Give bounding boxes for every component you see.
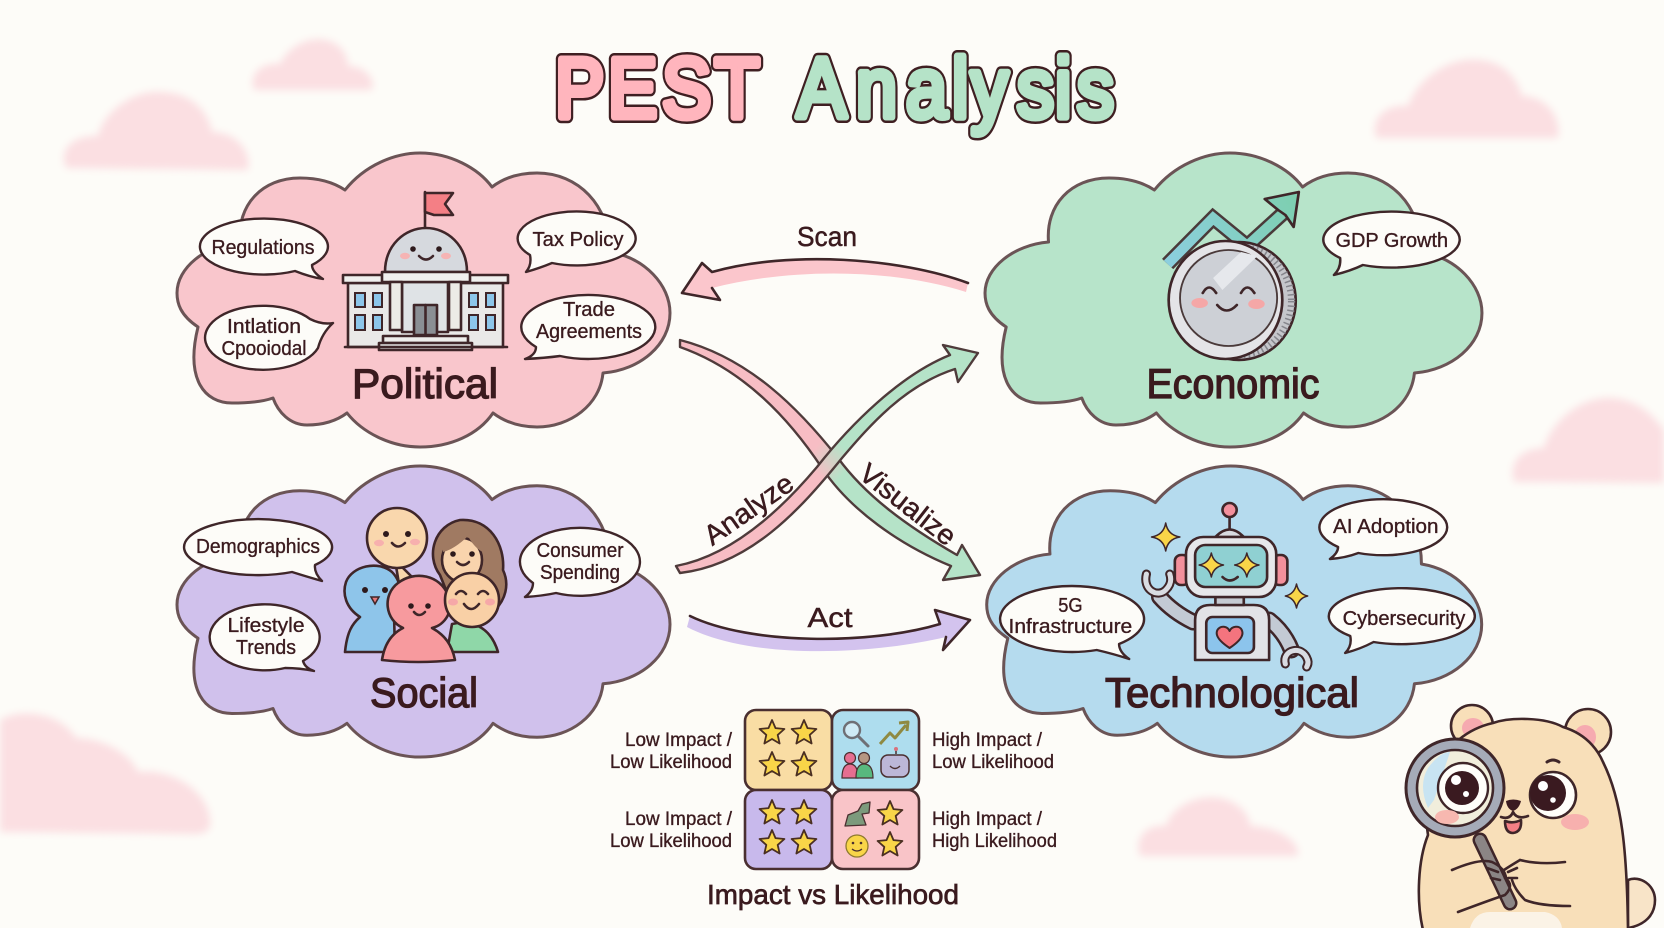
heading: Economic: Economic bbox=[1146, 360, 1320, 407]
arrow: Scan bbox=[682, 221, 968, 300]
cell: low impact low likelihood (yellow) bbox=[745, 710, 832, 790]
label: top-left quadrant: Low Likelihood bbox=[610, 752, 732, 773]
label: bottom-right quadrant: High Likelihood bbox=[932, 831, 1057, 852]
bubble: Tax Policy bbox=[518, 211, 636, 272]
icon: robot bbox=[1146, 503, 1308, 667]
chart: impact vs likelihood matrix bbox=[610, 710, 1057, 910]
bubble: AI Adoption bbox=[1319, 499, 1447, 559]
label: top-right quadrant: High Impact / bbox=[932, 730, 1043, 751]
bubble: AI Adoption: AI Adoption bbox=[1333, 516, 1438, 538]
arrow: Act bbox=[687, 602, 970, 651]
bubble: Consumer Spending: Spending bbox=[540, 562, 620, 584]
bubble: Cybersecurity: Cybersecurity bbox=[1343, 608, 1466, 630]
cell: high impact high likelihood (pink) bbox=[832, 790, 919, 869]
arrow: Scan: Scan bbox=[797, 221, 857, 252]
bubble: Trade Agreements: Agreements bbox=[536, 321, 642, 343]
bubble: GDP Growth bbox=[1323, 212, 1460, 275]
title: PEST Analysis: Analysis bbox=[797, 41, 1114, 135]
heading: Impact vs Likelihood: Impact vs Likelihood bbox=[707, 879, 959, 910]
label: bottom-right quadrant bbox=[932, 809, 1057, 852]
bubble: Consumer Spending bbox=[520, 528, 640, 597]
bubble: Lifestyle Trends: Lifestyle bbox=[228, 615, 304, 637]
bubble: Lifestyle Trends: Trends bbox=[236, 637, 296, 659]
cloud: Economic bbox=[985, 153, 1482, 447]
label: bottom-left quadrant bbox=[610, 809, 733, 852]
bubble: Regulations bbox=[200, 219, 328, 279]
icon: government building bbox=[343, 192, 508, 350]
panel: Political bbox=[177, 153, 670, 447]
label: bottom-left quadrant: Low Likelihood bbox=[610, 831, 732, 852]
cloud: Political bbox=[177, 153, 670, 447]
title: PEST Analysis bbox=[555, 41, 1114, 135]
mascot: bear with magnifying glass bbox=[1406, 705, 1655, 928]
bubble: 5G Infrastructure: 5G bbox=[1058, 595, 1083, 617]
heading: Political: Political bbox=[352, 360, 498, 407]
icon: group of people bbox=[345, 508, 506, 662]
panel: Economic bbox=[985, 153, 1482, 447]
panel: Social bbox=[177, 466, 670, 757]
label: top-right quadrant: Low Likelihood bbox=[932, 752, 1054, 773]
bubble: Inflation: Cpooiodal bbox=[222, 338, 306, 360]
arrow: Analyze bbox=[676, 345, 978, 573]
bubble: 5G Infrastructure: Infrastructure bbox=[1009, 616, 1132, 638]
label: top-left quadrant bbox=[610, 730, 733, 773]
bubble: Regulations: Regulations bbox=[212, 237, 314, 259]
label: bottom-right quadrant: High Impact / bbox=[932, 809, 1043, 830]
arrow: Analyze: Analyze bbox=[698, 467, 799, 551]
icon: smiling coin bbox=[1169, 241, 1296, 360]
bubble: Consumer Spending: Consumer bbox=[536, 540, 624, 562]
bubble: Cybersecurity bbox=[1329, 588, 1475, 653]
bubble: 5G Infrastructure bbox=[1000, 586, 1144, 659]
arrow: Visualize: Visualize bbox=[853, 457, 962, 552]
bubble: GDP Growth: GDP Growth bbox=[1335, 230, 1448, 252]
bubble: Trade Agreements bbox=[521, 295, 655, 359]
label: top-right quadrant bbox=[932, 730, 1054, 773]
title: PEST Analysis: PEST bbox=[555, 41, 760, 135]
title: PEST Analysis: Analysis bbox=[797, 41, 1114, 135]
cloud: Social bbox=[177, 466, 670, 757]
heading: Social: Social bbox=[370, 669, 478, 716]
bubble: Inflation bbox=[205, 306, 333, 370]
bubble: Tax Policy: Tax Policy bbox=[532, 229, 624, 251]
cloud: Technological bbox=[987, 466, 1482, 757]
bubble: Demographics bbox=[184, 519, 332, 581]
bubble: Inflation: Intlation bbox=[227, 316, 301, 338]
bubble: Demographics: Demographics bbox=[196, 536, 320, 558]
arrow: Act: Act bbox=[808, 602, 853, 633]
title: PEST Analysis: PEST bbox=[555, 41, 760, 135]
label: top-left quadrant: Low Impact / bbox=[625, 730, 733, 751]
heading: Technological: Technological bbox=[1105, 669, 1359, 716]
icon: growth arrow bbox=[1168, 192, 1299, 264]
bubble: Trade Agreements: Trade bbox=[563, 299, 615, 321]
panel: Technological bbox=[987, 466, 1482, 757]
cell: high impact low likelihood (blue) bbox=[832, 710, 919, 790]
arrow: Visualize bbox=[680, 340, 980, 580]
bubble: Lifestyle Trends bbox=[210, 604, 320, 671]
label: bottom-left quadrant: Low Impact / bbox=[625, 809, 733, 830]
cell: low impact low likelihood (purple) bbox=[745, 790, 832, 869]
